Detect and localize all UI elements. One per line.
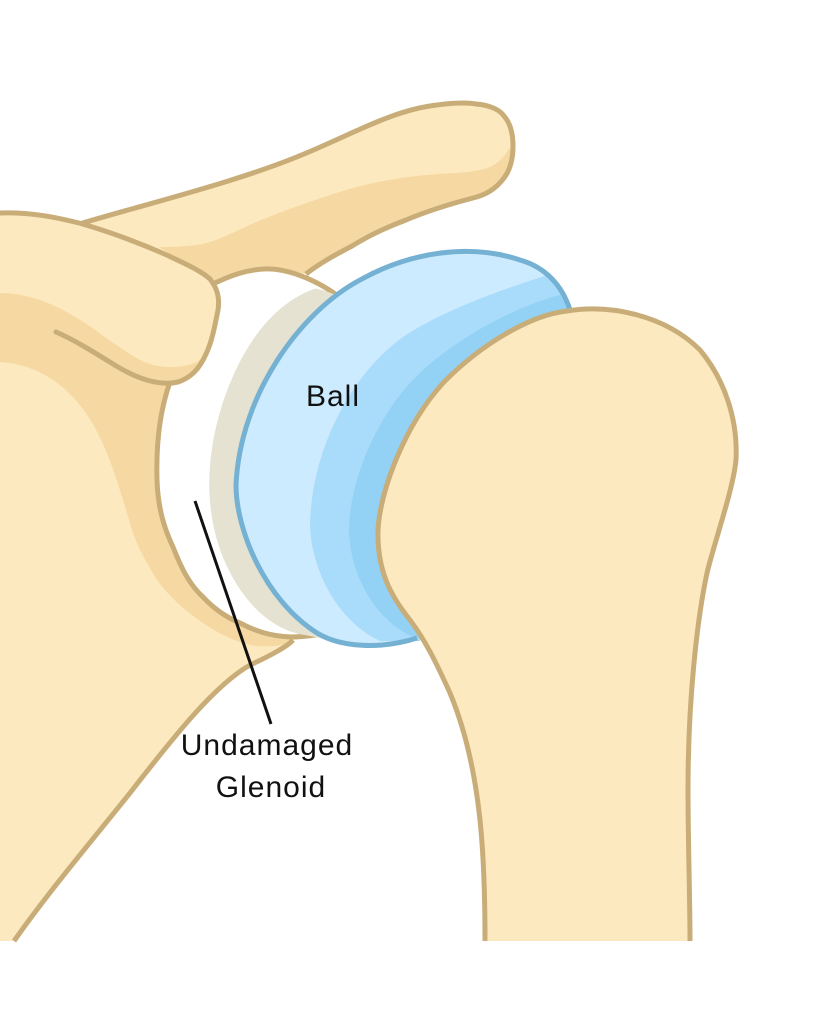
ball cartilage <box>236 251 572 645</box>
label: Undamaged Glenoid: Undamaged <box>181 729 353 762</box>
scapula body <box>0 290 322 941</box>
glenoid cartilage <box>209 289 360 640</box>
humerus bone <box>378 309 736 941</box>
acromion front bone <box>0 213 219 384</box>
label: Ball: Ball <box>306 380 360 413</box>
clavicle bone <box>81 103 513 299</box>
label: Undamaged Glenoid: Glenoid <box>216 771 326 804</box>
label line: glenoid pointer <box>195 501 271 724</box>
